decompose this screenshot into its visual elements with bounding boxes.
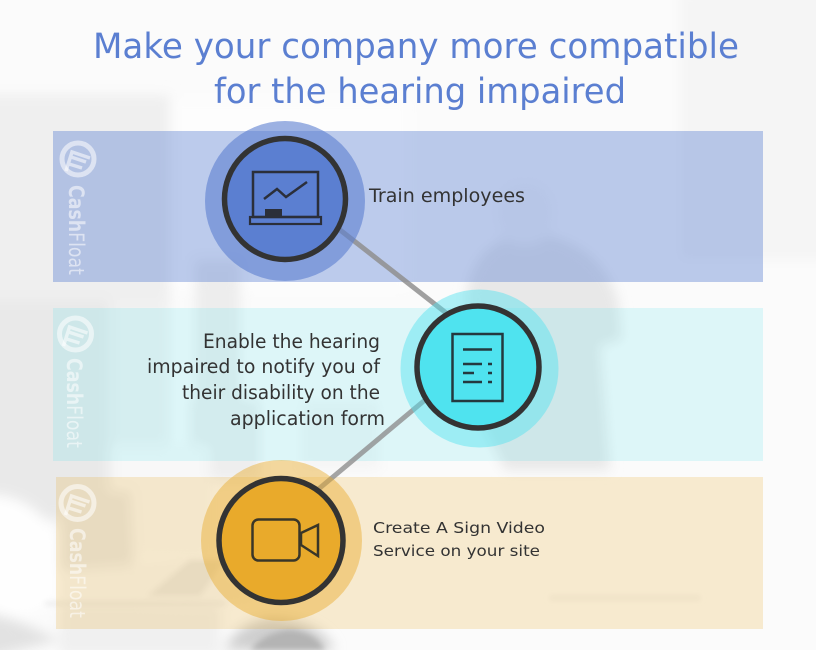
icon: chalkboard with chart	[250, 172, 321, 224]
connector: top to middle	[335, 226, 450, 316]
watermark logo: middle band: CashFloat	[62, 358, 86, 448]
label: sign video text: Service on your site	[373, 542, 540, 560]
watermark logo: top band: CashFloat	[64, 185, 88, 275]
icon: video camera	[252, 520, 318, 560]
band: application form	[53, 308, 763, 461]
connector: middle to bottom	[315, 400, 425, 492]
watermark logo: middle band	[60, 318, 92, 448]
band: sign video	[56, 477, 763, 629]
icon: document	[452, 334, 502, 401]
label: application form text: Enable the hearing	[203, 330, 380, 353]
label: sign video text	[373, 519, 545, 560]
node: training icon	[205, 121, 365, 281]
watermark logo: bottom band	[61, 486, 94, 618]
label: train employees: Train employees	[368, 185, 525, 207]
node: video camera icon	[201, 460, 362, 621]
title: for the hearing impaired	[214, 72, 626, 112]
title	[93, 27, 739, 112]
label: application form text: their disability on the	[182, 381, 380, 404]
label: application form text: application form	[230, 407, 385, 430]
watermark logo: top band	[62, 143, 94, 275]
watermark logo: bottom band: CashFloat	[65, 528, 89, 618]
label: sign video text: Create A Sign Video	[373, 519, 545, 537]
label: application form text	[147, 330, 385, 430]
title: Make your company more compatible	[93, 27, 739, 67]
node: document icon	[400, 290, 558, 448]
band: train employees	[53, 131, 763, 282]
label: application form text: impaired to notify you of	[147, 355, 381, 378]
